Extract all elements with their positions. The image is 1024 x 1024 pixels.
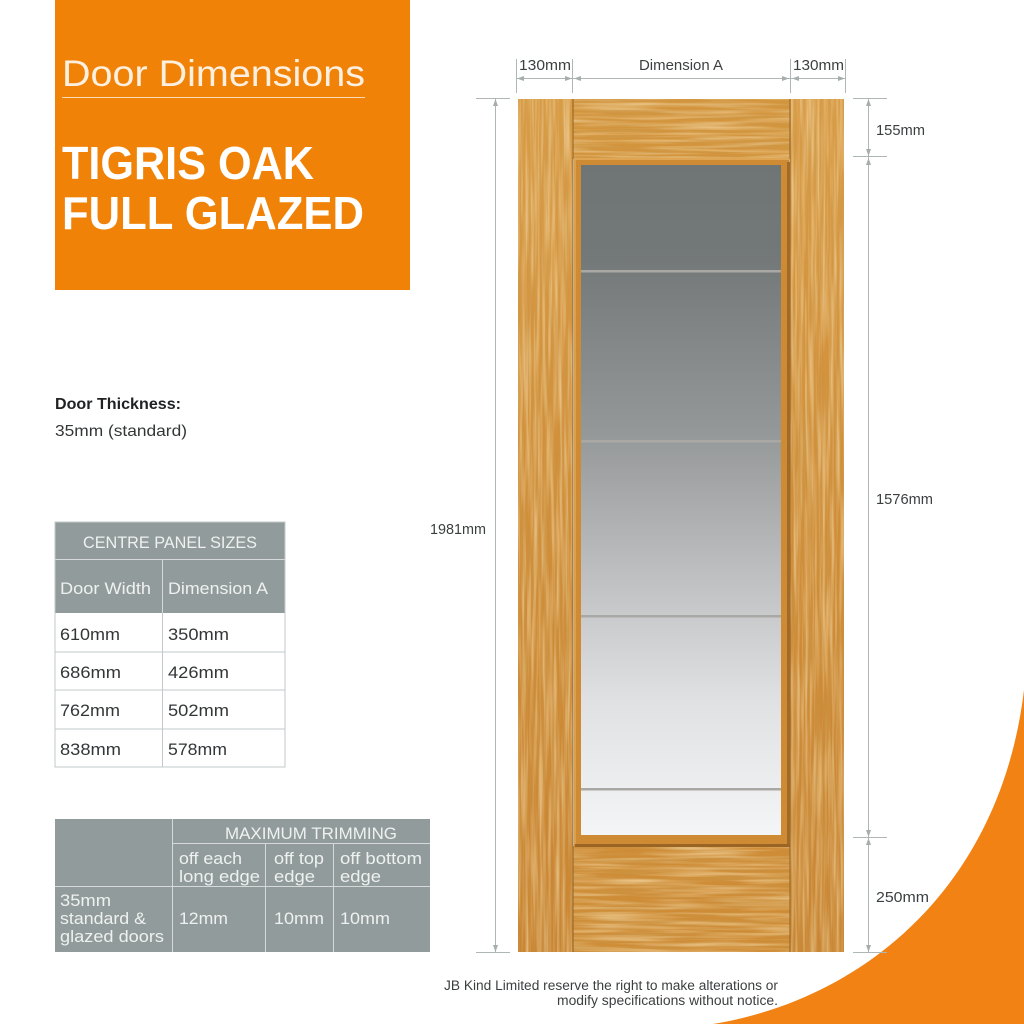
- table: centre panel sizes: 610mm: [60, 625, 120, 644]
- table: maximum trimming: 10mm: [274, 909, 324, 928]
- table: maximum trimming: 12mm: [179, 909, 228, 928]
- glazing bead frame: [574, 158, 789, 846]
- heading: product name: FULL GLAZED: [62, 187, 364, 239]
- top dimension: Dimension A: Dimension A: [639, 57, 723, 74]
- table: maximum trimming: MAXIMUM TRIMMING: [225, 824, 397, 843]
- table: centre panel sizes: 686mm: [60, 663, 121, 682]
- overall height dimension: 1981mm: [430, 98, 510, 952]
- table: centre panel sizes: Dimension A: [168, 579, 269, 598]
- top dimension: Dimension A: [573, 57, 790, 93]
- table: maximum trimming: edge: [274, 867, 315, 886]
- right dimension: 155mm: 155mm: [876, 122, 925, 139]
- table: maximum trimming: 10mm: [340, 909, 390, 928]
- top dimension: right 130mm: 130mm: [793, 57, 844, 74]
- right dimension: 250mm: 250mm: [876, 889, 929, 906]
- heading: product name: [62, 137, 364, 239]
- table: centre panel sizes: 838mm: [60, 740, 121, 759]
- heading: door dimensions: Door Dimensions: [62, 53, 365, 94]
- top dimension: left 130mm: [516, 57, 572, 93]
- table: centre panel sizes: 762mm: [60, 701, 120, 720]
- overall height dimension: 1981mm: 1981mm: [430, 521, 486, 538]
- right dimension: 1576mm: 1576mm: [876, 491, 933, 508]
- door thickness text: 35mm (standard): [55, 423, 187, 440]
- disclaimer text: JB Kind Limited reserve the right to make alterations or: [444, 978, 779, 993]
- table: maximum trimming: off each: [179, 849, 242, 868]
- door thickness text: [55, 396, 187, 440]
- door thickness text: Door Thickness:: [55, 396, 181, 413]
- table: centre panel sizes: 578mm: [168, 740, 227, 759]
- table: maximum trimming: off top: [274, 849, 324, 868]
- door top rail: [573, 99, 790, 159]
- glass bars: [581, 270, 781, 790]
- table: centre panel sizes: 426mm: [168, 663, 229, 682]
- table: centre panel sizes: CENTRE PANEL SIZES: [83, 533, 257, 552]
- table: centre panel sizes: [55, 522, 285, 767]
- orange corner swoosh: [713, 690, 1024, 1024]
- table: maximum trimming: edge: [340, 867, 381, 886]
- heading: product name: TIGRIS OAK: [62, 137, 314, 189]
- right dimension: 1576mm: [866, 157, 933, 837]
- table: centre panel sizes: Door Width: [60, 579, 151, 598]
- right dimension: 155mm: [853, 98, 925, 156]
- disclaimer text: modify specifications without notice.: [557, 993, 778, 1008]
- disclaimer text: [444, 978, 779, 1008]
- door left stile: [518, 99, 573, 952]
- top dimension: left 130mm: 130mm: [519, 57, 571, 74]
- table: maximum trimming: standard &: [60, 909, 147, 928]
- table: maximum trimming: [55, 819, 430, 952]
- table: maximum trimming: off bottom: [340, 849, 422, 868]
- table: maximum trimming: glazed doors: [60, 927, 164, 946]
- table: centre panel sizes: 502mm: [168, 701, 229, 720]
- door illustration: [518, 99, 844, 952]
- door right stile: [790, 99, 844, 952]
- glass panel: [581, 165, 781, 835]
- right dimension: 250mm: [853, 838, 929, 952]
- table: centre panel sizes: 350mm: [168, 625, 229, 644]
- top dimension: right 130mm: [791, 57, 846, 93]
- table: maximum trimming: long edge: [179, 867, 260, 886]
- door bottom rail: [573, 846, 790, 952]
- table: maximum trimming: 35mm: [60, 891, 111, 910]
- title panel: [55, 0, 410, 290]
